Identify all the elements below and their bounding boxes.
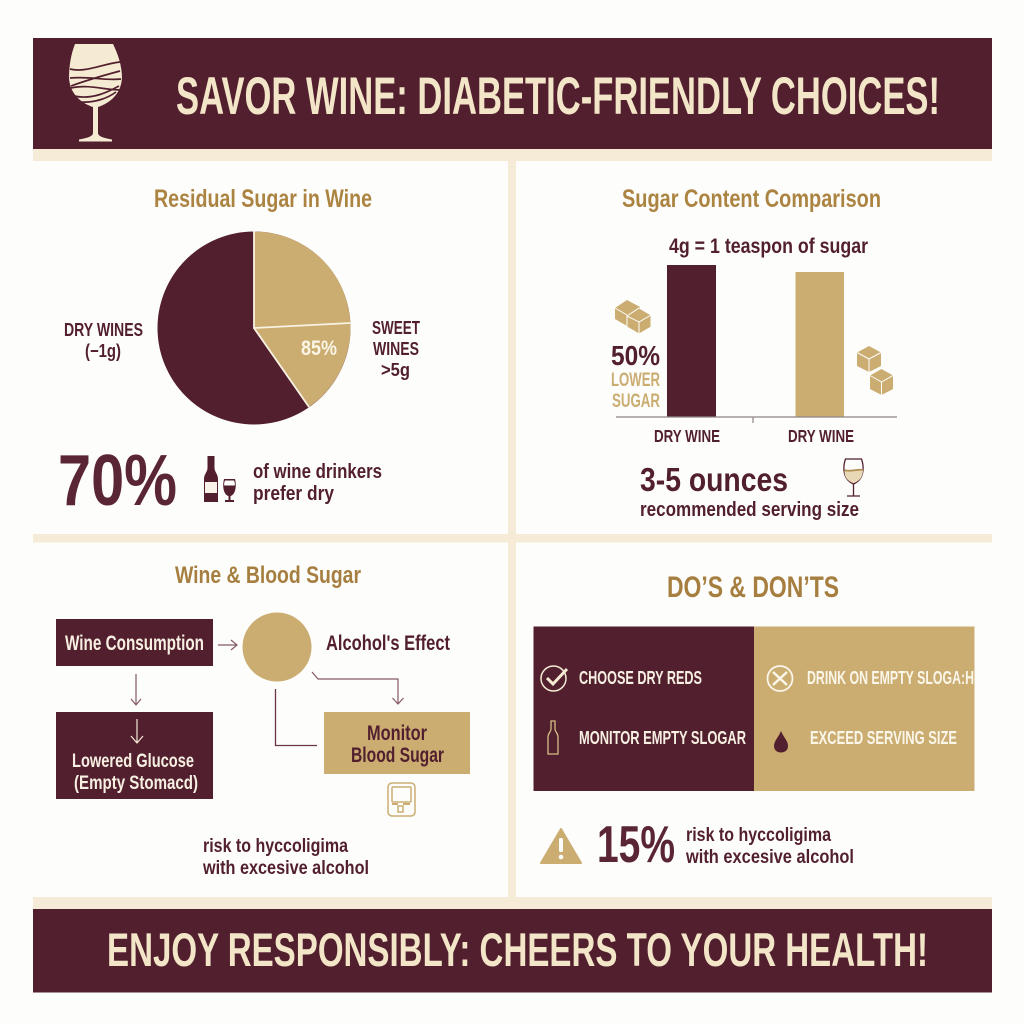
heading: dos and donts: DO’S & DON’TS — [667, 571, 839, 604]
heading: residual sugar: Residual Sugar in Wine — [154, 185, 372, 213]
box: wine consumption: Wine Consumption — [65, 632, 204, 655]
circle: alcohol effect — [242, 612, 312, 682]
column: dos — [534, 626, 754, 791]
pie chart: 85% — [301, 337, 337, 360]
panel: sugar comparison — [611, 185, 897, 521]
icon: sugar cubes right — [857, 346, 893, 395]
column: dos: CHOOSE DRY REDS — [579, 668, 702, 688]
stat: serving size: recommended serving size — [640, 498, 859, 521]
text: risk: with excesive alcohol — [685, 846, 854, 868]
icon: bottle and glass — [204, 456, 236, 502]
text: teaspoon: 4g = 1 teaspon of sugar — [669, 235, 868, 258]
box: wine consumption — [56, 619, 213, 666]
box: monitor blood sugar: Monitor — [367, 722, 427, 745]
header banner — [33, 38, 992, 149]
label: dry wines: DRY WINES — [64, 320, 143, 340]
box: lowered glucose: (Empty Stomacd) — [74, 772, 198, 794]
label: sweet wines: SWEET — [372, 318, 420, 338]
heading: wine and blood sugar: Wine & Blood Sugar — [175, 562, 361, 589]
panel: residual sugar — [58, 185, 420, 521]
box: lowered glucose — [56, 712, 213, 799]
label: sweet wines: >5g — [381, 360, 410, 380]
column: donts: EXCEED SERVING SIZE — [810, 728, 957, 748]
panel: dos and donts — [534, 571, 974, 874]
icon: glucose meter — [388, 783, 415, 816]
icon: serving glass — [844, 459, 863, 496]
icon: cross — [768, 666, 792, 691]
column: donts — [754, 626, 974, 791]
icon: bottle outline — [548, 721, 558, 754]
pie chart — [158, 232, 351, 424]
icon: check — [541, 666, 567, 691]
icon: drop — [774, 731, 788, 752]
icon: wine glass — [69, 44, 122, 142]
text: risk: with excesive alcohol — [202, 857, 369, 879]
arrow: down to glucose — [131, 674, 141, 705]
stat: 15%: 15% — [597, 816, 675, 874]
stat: 70%: 70% — [58, 441, 177, 521]
box: monitor blood sugar — [324, 712, 470, 774]
column: dos: MONITOR EMPTY SLOGAR — [579, 728, 746, 748]
connector: circle to monitor — [276, 689, 317, 746]
stat: serving size: 3-5 ounces — [640, 461, 788, 498]
icon: warning — [541, 829, 581, 863]
stat: serving size — [640, 461, 859, 521]
label: dry wines: (−1g) — [85, 341, 121, 361]
text: risk: risk to hyccoligima — [203, 835, 348, 857]
text: risk: risk to hyccoligima — [686, 824, 831, 846]
panel: wine and blood sugar — [56, 562, 470, 879]
box: monitor blood sugar: Blood Sugar — [351, 744, 444, 767]
label: alcohol effect: Alcohol's Effect — [326, 632, 450, 655]
text: wine drinkers: prefer dry — [253, 483, 335, 505]
stat: 50% lower sugar: SUGAR — [612, 391, 660, 412]
footer banner — [33, 909, 992, 992]
bar chart — [616, 265, 897, 446]
text: wine drinkers: of wine drinkers — [253, 461, 382, 483]
box: lowered glucose: Lowered Glucose — [72, 750, 194, 772]
stat: 50% lower sugar: LOWER — [611, 370, 660, 391]
arrow: to circle — [218, 640, 237, 650]
label: sweet wines: WINES — [373, 339, 419, 359]
stat: 50% lower sugar — [611, 340, 660, 412]
bar chart: DRY WINE — [654, 426, 720, 446]
icon: sugar cubes left — [615, 300, 651, 334]
stat: 50% lower sugar: 50% — [611, 340, 660, 371]
arrow: circle to monitor — [312, 672, 404, 704]
bar chart: DRY WINE — [788, 426, 854, 446]
heading: sugar content: Sugar Content Comparison — [622, 185, 881, 213]
